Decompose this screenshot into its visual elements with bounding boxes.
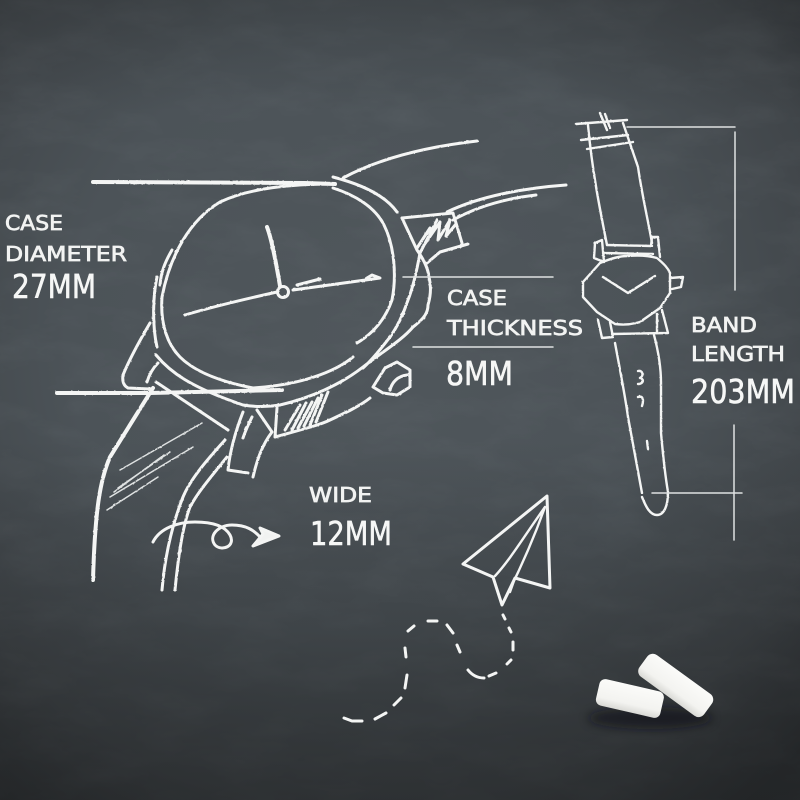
label: band length: LENGTH (691, 342, 785, 366)
hands pivot (278, 286, 288, 298)
lower lugs (598, 310, 668, 338)
strap hatching (107, 423, 202, 510)
chalk shadow (588, 707, 712, 729)
dashed flight path (344, 615, 513, 721)
label: case diameter: 27MM (12, 267, 96, 306)
label: case thickness (446, 286, 583, 393)
case (583, 256, 670, 325)
label: wide: 12MM (310, 514, 392, 553)
watch face outline (162, 184, 394, 388)
upper band strap lines (333, 141, 566, 220)
large watch sketch (57, 141, 566, 590)
label: case thickness: THICKNESS (446, 316, 583, 340)
strap keeper (228, 410, 272, 477)
lower-left lug (123, 323, 158, 389)
chalk pieces (588, 651, 716, 729)
minute and second hands (185, 275, 380, 315)
label: case diameter: CASE (5, 211, 63, 235)
lower-left strap lines (93, 388, 153, 580)
chalk piece left (595, 678, 665, 719)
upper band (576, 113, 652, 245)
hour hand (267, 227, 280, 286)
band holes (638, 371, 648, 449)
label: band length: BAND (691, 313, 757, 337)
diameter guide line top (93, 182, 335, 184)
icon: paper plane (463, 496, 550, 605)
small watch sketch (576, 113, 683, 515)
label: case thickness: CASE (447, 286, 507, 310)
bezel outer ring (154, 218, 430, 406)
lower band (615, 335, 668, 515)
label: wide: WIDE (309, 483, 372, 507)
label: case diameter (5, 211, 127, 306)
crown (373, 362, 410, 395)
strap edge lines (156, 382, 228, 590)
chalk piece right (635, 651, 716, 720)
label: case diameter: DIAMETER (5, 242, 127, 266)
label: wide (309, 483, 392, 553)
lower case band with hatching (275, 392, 370, 437)
label: case thickness: 8MM (446, 354, 513, 393)
band length dimension lines (627, 127, 742, 540)
upper lugs (594, 237, 660, 262)
hands (603, 276, 655, 293)
top lug with hatching (402, 213, 468, 263)
label: band length (691, 313, 795, 411)
lower diameter guide line (57, 390, 282, 393)
wide arrow (153, 522, 279, 548)
crown (670, 277, 683, 289)
case thickness guide lines (403, 277, 553, 347)
